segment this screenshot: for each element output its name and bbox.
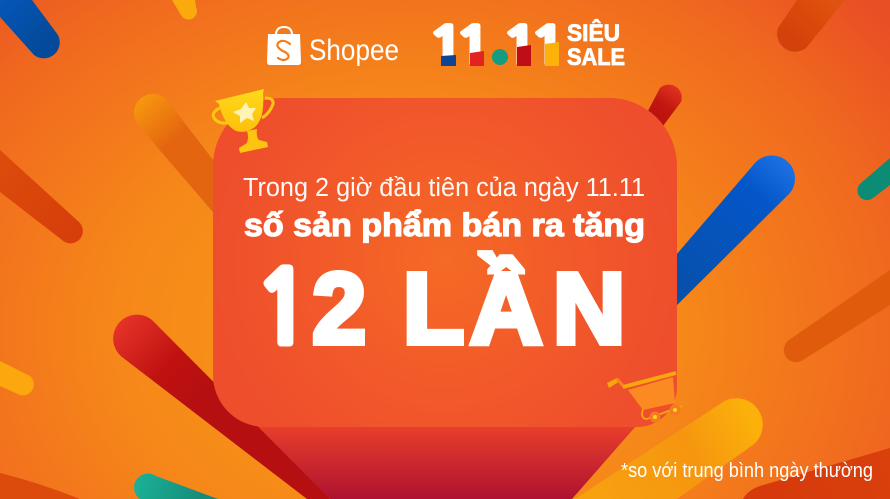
label SIÊU SALE [567,19,625,71]
text: line 2: số sản phẩm bán ra tăng [244,207,645,243]
digits 11.11: 1 [426,20,466,72]
label SIÊU SALE: SIÊU [567,19,620,47]
digits 11.11: 1 [454,20,494,72]
text: line 1: Trong 2 giờ đầu tiên của ngày 11.11 [243,174,645,202]
digit colour blocks [441,42,559,66]
wordmark: Shopee [309,34,399,67]
big red bar [113,315,330,499]
text: 12 LẦN [254,253,625,365]
red shadow area under panel [236,410,650,499]
logo: Shopee [267,27,399,67]
label SIÊU SALE: SALE [567,44,625,71]
icon: shopping cart [607,373,682,422]
icon: shopping bag [267,27,301,65]
dot [492,49,508,65]
digits 11.11 [426,20,568,72]
big yellow bar [575,398,763,499]
digits 11.11: 1 [500,20,540,72]
digits 11.11: 1 [528,20,568,72]
text: 12 LẦN: LẦN [403,253,625,365]
panel: main message [213,98,677,427]
icon: trophy [213,89,273,153]
text: 12 LẦN: 12 [254,253,366,365]
logo: 11.11 Siêu Sale [426,19,625,72]
